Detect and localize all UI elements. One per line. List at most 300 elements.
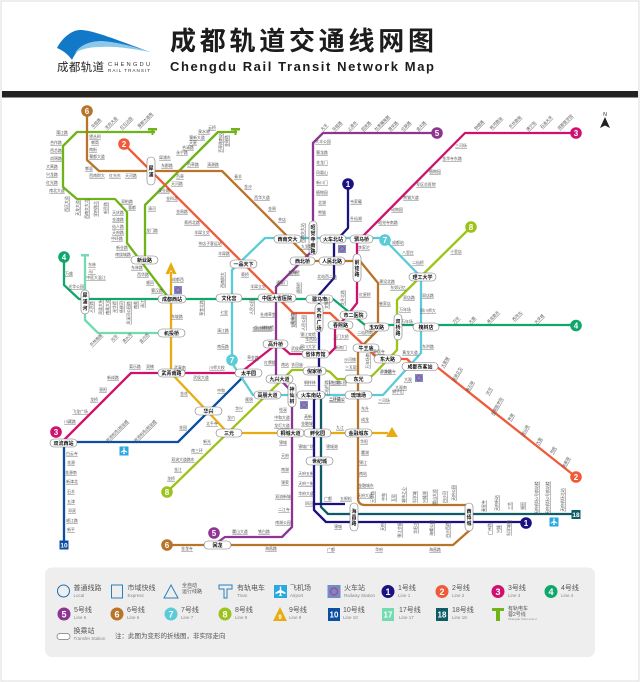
line 6 xyxy=(87,111,470,545)
rotated labels: southeast: 天府机场1号航站楼 xyxy=(534,481,539,515)
station labels: southwest: 金江 xyxy=(174,467,182,472)
station labels: northeast: 三河场 xyxy=(455,143,467,148)
transfer stations: 机投桥 xyxy=(164,330,179,337)
rotated labels: northeast: 成都医学院 xyxy=(556,113,574,131)
transfer stations: 觉 xyxy=(310,230,316,237)
station labels: southeast: 广都 xyxy=(324,496,332,501)
rotated labels: northwest: 西南财大 xyxy=(220,272,225,288)
transfer stations: 九兴大道 xyxy=(269,376,290,383)
transfer stations: 三元 xyxy=(224,431,234,437)
station labels: southeast: 麓湖 xyxy=(361,450,369,455)
transfer stations: 河 xyxy=(82,305,88,312)
rotated labels: southeast: 万年场南 xyxy=(365,353,370,369)
transfer stations: 成都东客站 xyxy=(407,364,433,370)
station labels: southeast: 锦城湖 xyxy=(326,444,338,449)
station labels: northwest: 西南财大 xyxy=(89,173,105,178)
station labels: central: 新南门 xyxy=(335,345,347,350)
station labels: southwest: 金沙博物馆 xyxy=(252,326,272,331)
rotated labels: southeast: 连山坡 xyxy=(520,424,530,437)
station labels: northwest: 百草路 xyxy=(187,162,199,167)
station labels: southwest: 锦城 xyxy=(279,440,287,445)
station labels: northwest: 兴龙路 xyxy=(46,172,58,177)
station labels: northeast: 动物园 xyxy=(391,207,403,212)
legend: row 1 items: Local xyxy=(74,593,84,598)
transfer stations: 高升桥 xyxy=(268,341,283,348)
station labels: southwest: 双流大道路东 xyxy=(171,457,195,462)
legend: row 2 items: Line 10 xyxy=(343,615,358,620)
rotated labels: northeast: 西河北 xyxy=(511,310,523,322)
rotated labels: southeast: 成都医学院 xyxy=(490,396,504,416)
station labels: southeast: 南站 xyxy=(359,471,367,476)
station labels: southwest: 龙爪 xyxy=(227,415,235,420)
transfer stations: 槐树店 xyxy=(418,324,434,331)
legend: row 1 items: 4 xyxy=(548,587,554,597)
legend: row 2 items: 8号线 xyxy=(235,605,253,614)
station labels: northeast: 成都站 xyxy=(392,240,404,245)
station labels: northwest: 天河路 xyxy=(171,181,183,186)
legend: row 1 items: Line 2 xyxy=(452,593,465,598)
rotated labels: southeast: 天府 xyxy=(380,523,385,531)
rotated labels: northwest: 金沙西 xyxy=(138,332,150,344)
transfer stations: 东大路 xyxy=(380,356,395,363)
transfer stations: 西 xyxy=(466,509,472,515)
rotated labels: southeast: 兴隆 xyxy=(496,525,501,533)
station labels: southeast: 天府五街 xyxy=(298,471,314,476)
rotated labels: southeast: 广州路 xyxy=(487,523,492,535)
station labels: southwest: 中和 xyxy=(217,388,225,393)
station labels: southwest: 锦荣 xyxy=(281,480,289,485)
station labels: northeast: 花龙门 xyxy=(316,160,328,165)
station labels: southeast: 东洪路 xyxy=(422,344,434,349)
station labels: northwest: 南街 xyxy=(89,147,97,152)
transfer stations: 双 xyxy=(395,318,401,325)
rotated labels: southeast: 惠王陵 xyxy=(465,380,475,393)
station labels: northwest: 光华公园 xyxy=(68,284,84,289)
station labels: southwest: 龙桥 xyxy=(167,476,175,481)
legend: row 2 items: Line 9 xyxy=(289,615,302,620)
transfer stations: 春熙路 xyxy=(333,322,348,329)
station labels: southwest: 武侯大道 xyxy=(193,375,209,380)
station labels: southwest: 花源南 xyxy=(65,470,77,475)
station labels: northwest: 成都西 xyxy=(172,277,184,282)
station labels: central: 静居寺 xyxy=(373,349,385,354)
transfer stations: 路 xyxy=(354,271,360,278)
legend: row 2 items: 10号线 xyxy=(343,605,365,614)
station labels: central: 东门大桥 xyxy=(333,334,349,339)
transfer stations: 树 xyxy=(289,398,295,405)
transfer stations: 高朋大道 xyxy=(257,392,278,399)
rotated labels: northeast: 杜家碾南路 xyxy=(373,114,391,132)
legend: row 1 items: 2 xyxy=(439,587,445,597)
legend: row 1 items: 飞机场 xyxy=(290,583,311,592)
rotated labels: southeast: 天府机场2号航站楼 xyxy=(545,481,550,515)
rotated labels: northwest: 清江 xyxy=(140,300,145,308)
line 8 xyxy=(167,227,471,492)
line badges: 7 xyxy=(383,236,388,245)
station labels: northwest: 西芯路 xyxy=(50,148,62,153)
transfer stations: 倪家桥 xyxy=(307,368,322,375)
station labels: northwest: 合作路 xyxy=(50,140,62,145)
legend: row 2 items: 10 xyxy=(330,610,339,620)
station labels: northwest: 红光路 xyxy=(46,180,58,185)
legend: row 2 items: 18号线 xyxy=(452,605,474,614)
station labels: southwest: 太平寺 xyxy=(206,421,218,426)
legend: row 2 items: 5号线 xyxy=(74,605,92,614)
station labels: southeast: 大观南 xyxy=(395,385,407,390)
transfer stations: 锋 xyxy=(354,265,360,272)
title: 成都轨道交通线网图 xyxy=(170,21,434,58)
station labels: central: 锦江宾馆 xyxy=(300,332,316,337)
line badges: 1 xyxy=(524,519,529,528)
rotated labels: northwest: 学府路北 xyxy=(93,201,98,217)
station labels: southwest: 南苑路 xyxy=(217,344,229,349)
transfer stations: 驷马桥 xyxy=(354,236,369,243)
station labels: northeast: 花照壁 xyxy=(288,270,300,275)
station labels: northeast: 北湖 xyxy=(318,200,326,205)
station labels: northeast: 大丰公园 xyxy=(315,139,331,144)
legend: row 2 items: 18 xyxy=(438,610,447,620)
transfer stations: 双流西站 xyxy=(53,440,74,447)
rotated labels: southeast: 成渝立交 xyxy=(451,366,463,382)
icon: compass north xyxy=(600,112,610,128)
subtitle: Chengdu Rail Transit Network Map xyxy=(170,59,434,74)
station labels: southeast: 天府三街 xyxy=(298,481,314,486)
rotated labels: northeast: 毗河路站 xyxy=(489,116,503,130)
station labels: northwest: 羊犀路 xyxy=(218,251,230,256)
station labels: northwest: 望丛祠 xyxy=(89,134,101,139)
station labels: northwest: 郫县 xyxy=(85,166,93,171)
legend: row 1 items: 运行线路 xyxy=(182,588,202,595)
line 1 xyxy=(314,184,526,522)
line badges: 2 xyxy=(122,140,127,149)
rotated labels: northwest: 百草路南站 xyxy=(218,133,223,153)
station labels: southwest: 邓双 xyxy=(68,508,76,513)
legend: row 1 items: 3 xyxy=(495,587,501,597)
rotated labels: southeast: 界牌 xyxy=(507,413,515,422)
station labels: central: 二仙桥南 xyxy=(357,330,373,335)
rotated labels: southeast: 三岔 xyxy=(507,502,512,510)
station labels: southwest: 飞龙广场 xyxy=(72,409,88,414)
station labels: northwest: 羊犀立交 xyxy=(250,284,266,289)
station labels: southwest: 簇锦 xyxy=(245,397,253,402)
station labels: northeast: 植物园 xyxy=(429,169,441,174)
station labels: southwest: 晋阳 xyxy=(99,387,107,392)
station labels: southwest: 龙桥 xyxy=(90,397,98,402)
rotated labels: northwest: 东林南路 xyxy=(89,333,103,347)
rotated labels: northwest: 杨柳河 xyxy=(119,301,124,313)
station labels: northeast: 万年场 xyxy=(401,319,413,324)
transfer stations: 火车北站 xyxy=(323,236,343,243)
rotated labels: northwest: 西区大道 xyxy=(64,196,69,212)
legend: row 1 items: Railway Station xyxy=(344,593,376,598)
rotated labels: northeast: 上清寺 xyxy=(346,120,358,132)
station labels: northwest: 红光东 xyxy=(109,173,121,178)
transfer stations: 西北桥 xyxy=(295,258,310,265)
station labels: northwest: 西华路 xyxy=(137,272,149,277)
station labels: northwest: 郫筒 xyxy=(91,140,99,145)
station labels: southwest: 龙灯大道 xyxy=(274,423,290,428)
tram line 2 xyxy=(63,132,237,297)
transfer stations: 前 xyxy=(354,259,360,266)
legend: transfer station and note: 换乘站 xyxy=(74,626,94,635)
transfer stations: 孵化园 xyxy=(310,430,325,437)
station labels: southwest: 花园 xyxy=(179,425,187,430)
rotated labels: southeast: 白沙西路 xyxy=(445,522,450,538)
station labels: northeast: 李家沱 xyxy=(358,245,370,250)
station labels: central: 红牌楼 xyxy=(264,360,276,365)
station labels: southeast: 锦城 xyxy=(334,524,342,529)
legend: row 2 items xyxy=(58,605,537,621)
legend: row 2 items: Line 6 xyxy=(127,615,140,620)
station labels: southwest: 华兴 xyxy=(235,406,243,411)
station labels: northeast: 八里庄 xyxy=(402,250,414,255)
station labels: southeast: 广都 xyxy=(327,547,335,552)
station labels: southwest: 金龙寺 xyxy=(181,546,193,551)
station labels: central: 衣冠庙 xyxy=(291,362,303,367)
legend: row 1 items: 有轨电车 xyxy=(237,583,265,592)
station labels: southwest: 铁白路 xyxy=(258,529,270,534)
station labels: southwest: 五津 xyxy=(67,499,75,504)
rotated labels: northeast: 太升北路 xyxy=(340,290,345,306)
line 17 xyxy=(85,258,171,333)
rotated labels: northwest: 金瑞路 xyxy=(224,135,229,147)
transfer stations: 寺 xyxy=(310,236,316,243)
rotated labels: southwest: 双流机场1航站楼 xyxy=(105,419,129,443)
station labels: northwest: 永宁路 xyxy=(176,150,188,155)
transfer stations: 路 xyxy=(395,330,401,337)
station labels: northwest: 顺风 xyxy=(146,280,154,285)
line 9 xyxy=(171,272,388,433)
line badges: 8 xyxy=(469,223,474,232)
station labels: northwest: 杜甫草堂 xyxy=(260,312,276,317)
station labels: southwest: 岷江路 xyxy=(66,518,78,523)
rotated labels: southeast: 龙泉驿 xyxy=(561,456,571,469)
transfer stations: 回龙 xyxy=(212,542,223,549)
station labels: northwest: 蔡桥北路 xyxy=(184,220,200,225)
station labels: northwest: 茂业路 xyxy=(158,188,170,193)
rotated labels: northwest: 南熏 xyxy=(133,301,138,309)
rotated labels: southeast: 白沙河 xyxy=(442,491,447,503)
legend: transfer station and note: 注：此图为变形的折线图，非实际走向 xyxy=(115,631,226,640)
station labels: southwest: 新成路 xyxy=(107,375,119,380)
station labels: southeast: 静安路 xyxy=(380,369,392,374)
line badges: 5 xyxy=(435,129,440,138)
station labels: central: 武侯祠 xyxy=(291,346,303,351)
station labels: northwest: 天府路 xyxy=(112,230,124,235)
station labels: southwest: 天府 xyxy=(281,453,289,458)
station labels: southeast: 三河场 xyxy=(378,398,390,403)
legend: row 1 items xyxy=(58,582,579,598)
rotated labels: northwest: 凤溪河公园路 xyxy=(126,301,131,325)
rotated labels: northeast: 蓉华路 xyxy=(387,120,399,132)
legend: row 2 items: 9 xyxy=(278,615,282,621)
rotated labels: northeast: 红枫路 xyxy=(400,120,412,132)
rotated labels: southeast: 洪河 xyxy=(485,387,493,396)
rotated labels: northeast: 来龙路东 xyxy=(486,310,500,324)
line badges: 1 xyxy=(346,180,351,189)
station labels: central: 沙河铺 xyxy=(344,357,356,362)
station labels: northwest: 东郡路 xyxy=(161,163,173,168)
legend: row 1 items: Line 1 xyxy=(398,593,411,598)
station labels: southeast: 华阳 xyxy=(360,439,368,444)
line badges: 8 xyxy=(165,488,170,497)
transfer stations: 人民北路 xyxy=(322,258,342,265)
rotated labels: northwest: 人民公园 xyxy=(249,299,254,315)
transfer stations: 桥 xyxy=(395,324,401,331)
rotated labels: northwest: 西南交大北 xyxy=(84,199,89,219)
legend: row 2 items: Chengdu Tram Line 2 xyxy=(508,617,537,621)
station labels: central: 草金路 xyxy=(247,355,259,360)
station labels: northwest: 合清路 xyxy=(182,145,194,150)
station labels: central: 桐梓林 xyxy=(304,380,316,385)
station labels: northwest: 南北大道 xyxy=(49,188,65,193)
icons: railway stations xyxy=(174,245,423,409)
station labels: northwest: 七里 xyxy=(220,310,228,315)
station labels: northwest: 南绕城路 xyxy=(115,252,131,257)
legend: row 1 items: 1 xyxy=(385,587,391,597)
legend: row 1 items: Express xyxy=(128,593,145,598)
station labels: central: 南站 xyxy=(281,362,289,367)
station labels: northeast: 双店路 xyxy=(422,293,434,298)
rotated labels: southeast: 天府公园 xyxy=(451,485,456,501)
station labels: northwest: 泉水湖 xyxy=(198,129,210,134)
line badges xyxy=(50,105,582,551)
line badges: 18 xyxy=(572,512,580,519)
station labels: southeast: 九江 xyxy=(336,425,344,430)
logo: 成都轨道 xyxy=(57,60,104,74)
station labels: northwest: 金周 xyxy=(268,206,276,211)
transfer stations: 理工大学 xyxy=(412,274,433,281)
transfer stations: 西南交大 xyxy=(277,236,298,243)
transfer stations: 路 xyxy=(351,520,357,527)
rotated labels: southeast: 华阳北 xyxy=(413,522,418,534)
station labels: northwest xyxy=(46,125,297,330)
transfer stations: 骡马市 xyxy=(312,296,327,303)
logo: RAIL TRANSIT xyxy=(108,68,150,73)
station labels: central: 华西坝 xyxy=(305,337,317,342)
legend: row 2 items: 5 xyxy=(61,610,67,620)
station labels: northwest: 天河路 xyxy=(125,173,137,178)
transfer stations: 博 xyxy=(466,514,472,521)
rotated labels: northwest: 宽窄巷子 xyxy=(291,312,296,328)
rotated labels: northwest: 天府大道 xyxy=(104,116,118,130)
station labels: central xyxy=(247,330,412,401)
transfer stations: 省体育馆 xyxy=(305,351,326,358)
rotated labels: northeast: 东华路南 xyxy=(508,115,522,129)
rotated labels: northeast: 大学城 xyxy=(533,313,545,325)
icon: compass north: N xyxy=(603,112,607,118)
station labels: northwest: 清河 xyxy=(148,206,156,211)
transfer stations: 成都西站 xyxy=(162,296,182,303)
legend: row 1 items: Line 4 xyxy=(561,593,574,598)
station labels: northwest: 金沙博物馆 xyxy=(254,325,274,330)
rotated labels: southeast: 中和 xyxy=(381,493,386,501)
rotated labels: northwest: 新民路 xyxy=(103,202,108,214)
station labels: northwest: 蜀都大道 xyxy=(89,154,105,159)
station labels: central: 三瓦窑 xyxy=(345,365,357,370)
icons: airports xyxy=(120,446,558,526)
station labels: northwest: 天星 xyxy=(189,140,197,145)
station labels: southwest: 白云寺 xyxy=(66,451,78,456)
station labels: northwest: 马厂 xyxy=(88,269,96,274)
legend: row 2 items: 7 xyxy=(168,610,174,620)
station labels: southwest: 南三环 xyxy=(191,448,203,453)
transfer stations: 府 xyxy=(316,313,322,320)
station labels: southeast: 金融城 xyxy=(301,421,313,426)
station labels: central: 四川大学 xyxy=(300,344,316,349)
station labels: southeast: 天府大道 xyxy=(357,493,373,498)
line 7 xyxy=(232,238,421,395)
station labels: southwest: 新津北 xyxy=(66,479,78,484)
station labels: northwest: 蔡桥 xyxy=(241,272,249,277)
station labels: northeast: 升仙湖 xyxy=(350,216,362,221)
legend: row 1 items: 火车站 xyxy=(344,583,365,592)
rotated labels: northwest xyxy=(64,111,296,347)
station labels: northeast: 北站西二路 xyxy=(317,274,337,279)
line 2 xyxy=(124,144,576,477)
station labels: northeast: 金华寺东路 xyxy=(442,156,462,161)
line badges: 6 xyxy=(165,541,170,550)
station labels: southwest: 二江寺 xyxy=(278,507,290,512)
station labels: northeast: 九里堤 xyxy=(301,244,313,249)
line badges: 4 xyxy=(574,322,579,330)
rotated labels: southeast: 天府机场北站 xyxy=(560,488,565,512)
station labels: northwest: 蜀汉路 xyxy=(151,288,163,293)
station labels: northeast: 东郊记忆 xyxy=(390,285,406,290)
station labels: northeast: 四川师大 xyxy=(420,308,436,313)
line badges: 4 xyxy=(62,253,67,262)
rotated labels: northeast: 西南交大站 xyxy=(300,223,305,243)
transfer stations: 世纪城 xyxy=(312,458,327,465)
rotated labels: southeast: 元华路 xyxy=(370,491,375,503)
rotated labels: southwest: 双流机场2航站楼 xyxy=(133,419,157,443)
station labels: northwest: 金沙 xyxy=(244,184,252,189)
station labels: northeast: 韦家碾 xyxy=(350,199,362,204)
transfer stations: 仙 xyxy=(289,392,295,399)
rotated labels: northeast: 大面 xyxy=(467,315,477,324)
rotated labels: southeast: 海螺公园 xyxy=(429,520,434,536)
station labels: northwest: 茶店子客运站 xyxy=(198,241,222,246)
rotated labels: northwest: 光华 xyxy=(109,333,119,342)
rotated labels: southeast: 科学城 xyxy=(412,491,417,503)
station labels: northwest: 茶店 xyxy=(278,217,286,222)
transfer stations: 金融城东 xyxy=(348,430,369,437)
station labels: northwest: 万盛 xyxy=(65,271,73,276)
station labels: northwest: 云桥 xyxy=(208,125,216,130)
legend: row 2 items: Line 18 xyxy=(452,615,467,620)
line badges: 3 xyxy=(54,428,59,437)
station labels: northwest: 西华大道 xyxy=(254,195,270,200)
legend: row 2 items: 6号线 xyxy=(127,605,145,614)
station labels: southwest: 双楠 xyxy=(146,364,154,369)
station labels: southwest: 武青南 xyxy=(174,365,186,370)
transfer stations: 南 xyxy=(310,242,316,249)
legend: row 2 items: Line 7 xyxy=(181,615,194,620)
legend: row 2 items: 蓉2号线 xyxy=(508,611,526,618)
legend: row 2 items: Line 17 xyxy=(399,615,414,620)
legend: row 2 items: 17 xyxy=(384,610,393,620)
station labels: southeast: 东湖公园 xyxy=(331,380,347,385)
station labels: southwest xyxy=(64,326,291,551)
station labels: northwest: 羊犀立交 xyxy=(194,230,210,235)
legend: row 1 items: 3号线 xyxy=(508,583,526,592)
station labels: northeast: 军区总医院 xyxy=(416,182,436,187)
station labels: southeast: 四河 xyxy=(305,501,313,506)
station labels: northeast: 植物园 xyxy=(316,190,328,195)
station labels: northwest: 中环路 xyxy=(111,236,123,241)
station labels: northwest: 大禹路 xyxy=(46,164,58,169)
rotated labels: southeast: 秦皇寺 xyxy=(481,500,486,512)
